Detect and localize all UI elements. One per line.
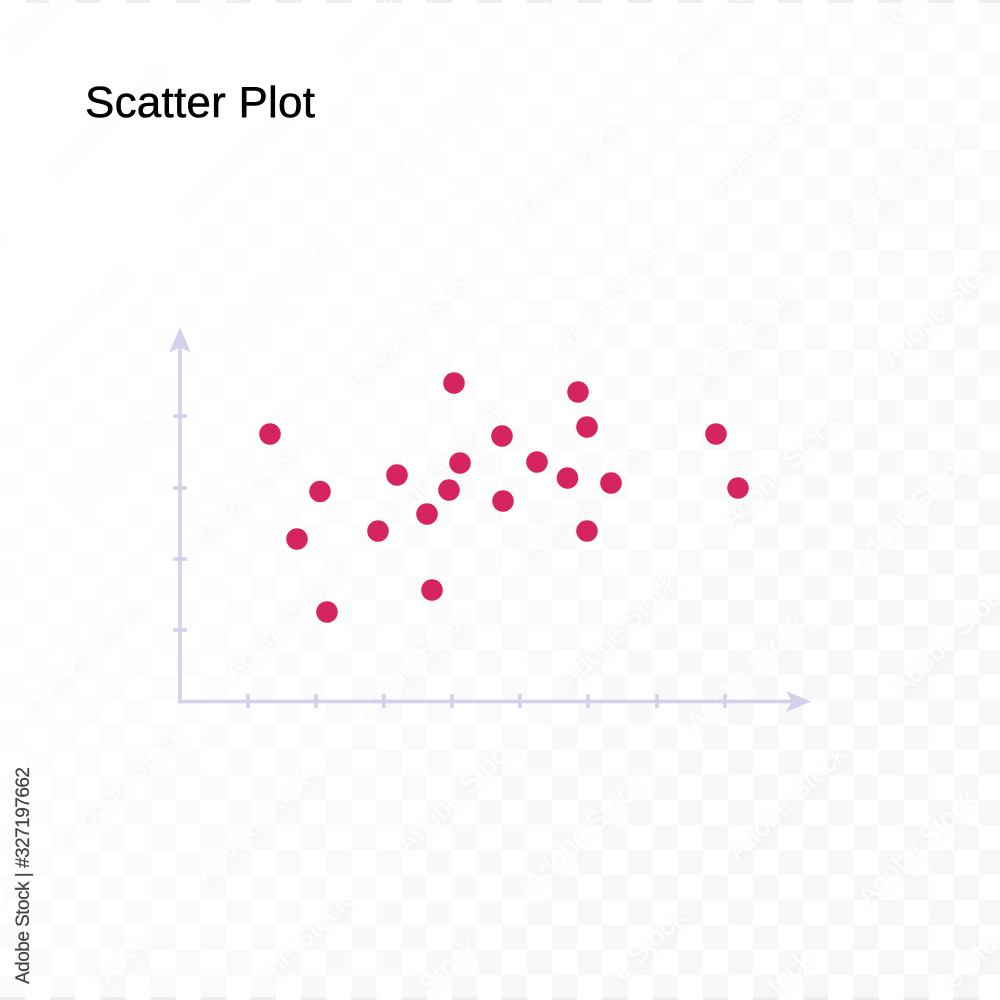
watermark layer: Adobe Stock: [345, 599, 477, 727]
watermark layer: Adobe Stock: [721, 738, 853, 866]
watermark layer: Adobe Stock: [371, 63, 503, 191]
watermark layer: Adobe Stock: [41, 53, 173, 181]
watermark layer: Adobe Stock: [715, 406, 847, 534]
watermark layer: Adobe Stock: [553, 566, 685, 694]
watermark layer: Adobe Stoc: [875, 254, 997, 372]
watermark layer: Adobe Stock: [5, 256, 137, 384]
stock id caption: Adobe Stock | #327197662: [13, 767, 34, 984]
watermark layer: Adobe Stock: [168, 93, 300, 221]
watermark layer: Adobe Stock: [175, 428, 307, 556]
watermark layer: [36, 0, 904, 3]
watermark layer: Adobe Stock: [680, 609, 812, 737]
watermark layer: tock: [761, 944, 818, 1000]
watermark layer: Adobe Stock: [383, 395, 515, 523]
watermark layer: Stock: [83, 924, 153, 993]
watermark layer: Adobe Stock: [498, 103, 630, 231]
scatter chart: [169, 327, 811, 712]
data points: [259, 372, 749, 623]
watermark layer: Adobe Stock: [391, 731, 523, 859]
watermark layer: Adobe Stock: [705, 71, 837, 199]
watermark layer: Adobe Stock: [843, 448, 975, 576]
x axis with arrow and ticks: [178, 691, 811, 712]
watermark layer: Stock: [413, 931, 483, 1000]
title: Scatter Plot: [85, 78, 315, 127]
watermark layer: Adobe Stock: [211, 226, 343, 354]
watermark layer: be Stock: [259, 886, 356, 981]
watermark layer: e Stock: [605, 902, 691, 986]
watermark layer: Adobe Stock: [15, 588, 147, 716]
watermark layer: Adobe Stock: [518, 769, 650, 897]
watermark layer: Adobe Stock: [338, 266, 470, 394]
watermark layer: Adobe Stock: [51, 386, 183, 514]
watermark layer: Adobe Stock: [851, 783, 983, 911]
watermark layer: Adobe Stock: [218, 558, 350, 686]
watermark layer: Adobe Stock: [670, 274, 802, 402]
watermark layer: Adobe Stock: [188, 759, 320, 887]
y axis with arrow and ticks: [169, 327, 191, 704]
watermark layer: Adobe Stock: [543, 236, 675, 364]
watermark layer: Adobe Stock: [510, 436, 642, 564]
watermark layer: Adobe Stock: [58, 719, 190, 847]
watermark layer: Adobe Stock: [831, 113, 963, 241]
